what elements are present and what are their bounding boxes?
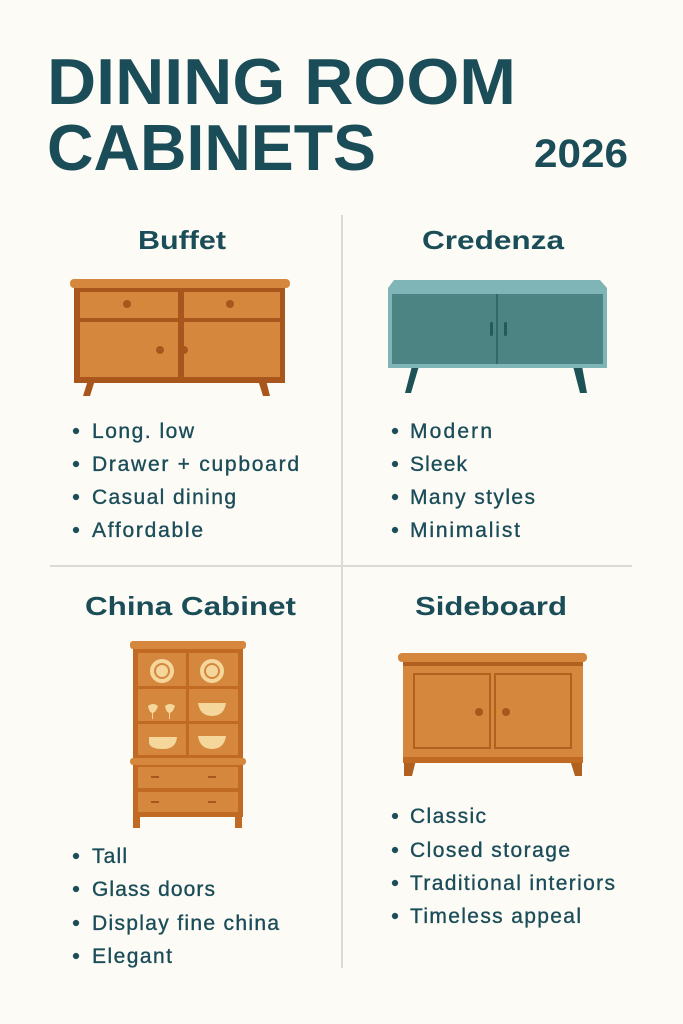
bullets: buffet <box>73 420 299 542</box>
panel: sideboard <box>392 591 615 928</box>
bullets: buffet: Affordable <box>92 519 203 542</box>
bullets: china cabinet: Elegant <box>92 945 172 968</box>
bullets: credenza: Modern <box>410 420 492 443</box>
bullets: china cabinet <box>73 845 279 968</box>
title: DINING ROOM <box>47 45 516 118</box>
heading: credenza: Credenza <box>422 225 565 255</box>
bullets: buffet: Casual dining <box>92 486 236 509</box>
bullets: sideboard: Traditional interiors <box>410 872 615 895</box>
heading: buffet: Buffet <box>138 225 226 255</box>
bullets: credenza: Many styles <box>410 486 535 509</box>
year: 2026 <box>534 132 628 176</box>
bullets: sideboard: Classic <box>410 805 486 828</box>
bullets: buffet: Drawer + cupboard <box>92 453 299 476</box>
panel: credenza <box>388 225 607 542</box>
icon: credenza <box>388 280 607 393</box>
bullets: sideboard <box>392 805 615 928</box>
bullets: credenza: Sleek <box>410 453 468 476</box>
icon: sideboard <box>398 653 587 776</box>
panel: china cabinet <box>73 591 296 968</box>
icon: buffet <box>70 279 290 396</box>
bullets: sideboard: Closed storage <box>410 839 570 862</box>
title <box>47 45 516 184</box>
icon: china cabinet <box>130 641 246 828</box>
bullets: credenza: Minimalist <box>410 519 520 542</box>
bullets: sideboard: Timeless appeal <box>410 905 581 928</box>
bullets: china cabinet: Display fine china <box>92 912 279 935</box>
panel: buffet <box>70 225 299 542</box>
bullets: china cabinet: Glass doors <box>92 878 215 901</box>
title: CABINETS <box>47 111 376 184</box>
heading: sideboard: Sideboard <box>415 591 567 621</box>
bullets: buffet: Long. low <box>92 420 195 443</box>
bullets: china cabinet: Tall <box>92 845 127 868</box>
bullets: credenza <box>392 420 535 542</box>
heading: china cabinet: China Cabinet <box>85 591 296 621</box>
